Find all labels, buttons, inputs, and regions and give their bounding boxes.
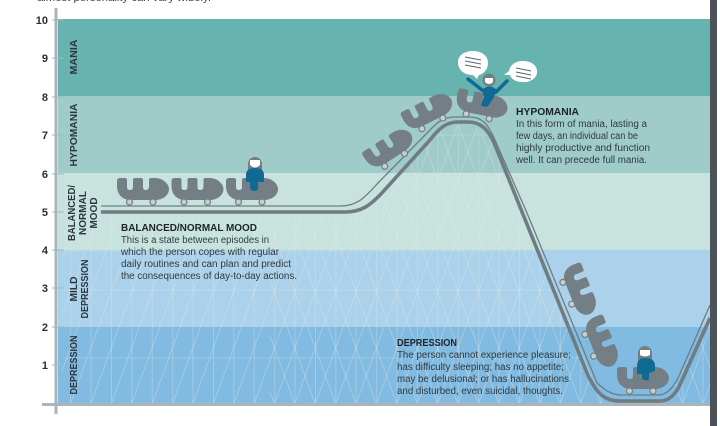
axis numbers: 5 [42,207,48,219]
band labels: MOOD [89,197,100,229]
band labels: DEPRESSION [80,260,91,318]
axis numbers [36,15,49,372]
text block: depression [397,337,571,397]
band: hypomania [58,96,710,173]
text block: hypomania: few days, an individual can be [516,131,638,142]
band labels: NORMAL [78,191,89,235]
band: balanced mood [58,173,710,250]
coaster trestle lattice [58,100,713,404]
figure: excited rider [468,74,507,107]
axis numbers: 8 [42,92,48,104]
cars: descending train [555,262,669,394]
band: depression [58,327,710,404]
axis numbers: 2 [42,322,48,334]
right edge bar [710,0,717,426]
speech bubble 1 [458,51,488,79]
band labels [67,40,100,394]
band labels: HYPOMANIA [69,104,80,166]
text block: depression: may be delusional; or has hallucinations [397,374,569,385]
text block: depression: DEPRESSION [397,337,457,349]
roller coaster track [101,117,710,401]
text block: balanced mood [120,222,297,282]
text block: balanced mood: daily routines and can plan and predict [121,259,291,270]
band labels: DEPRESSION [69,336,80,394]
cars: balanced mood train [117,178,278,205]
text block: hypomania [515,106,650,166]
text block: balanced mood: BALANCED/NORMAL MOOD [121,222,257,234]
cars: climbing train [361,88,510,176]
axis numbers: 3 [42,283,48,295]
text block: hypomania: highly productive and function [516,143,650,154]
band labels: BALANCED/ [67,185,78,241]
text block: balanced mood: which the person copes with regular [120,247,280,258]
band: mild depression [58,250,710,327]
axis numbers: 9 [42,53,48,65]
axis numbers: 6 [42,169,48,181]
axis numbers: 1 [42,360,48,372]
axis numbers: 10 [36,15,48,27]
text block: hypomania: In this form of mania, lasting a [516,119,647,130]
text block: balanced mood: This is a state between episodes in [121,235,269,246]
text block: depression: has difficulty sleeping; has no appetite; [397,362,564,373]
band: mania [58,19,710,96]
figure: calm rider [246,157,264,191]
band labels: MANIA [69,40,80,74]
text block: hypomania: well. It can precede full mania. [515,155,647,166]
speech bubble 2 [504,61,537,82]
text block: balanced mood: the consequences of day-to-day actions. [121,271,297,282]
text block: depression: The person cannot experience pleasure; [397,350,571,361]
axis numbers: 4 [42,245,49,257]
band labels: MILD [69,276,80,302]
figure: depressed rider [637,346,655,380]
text block: hypomania: HYPOMANIA [516,106,579,118]
axis numbers: 7 [42,130,48,142]
text block: depression: and disturbed, even suicidal, thoughts. [397,386,563,397]
